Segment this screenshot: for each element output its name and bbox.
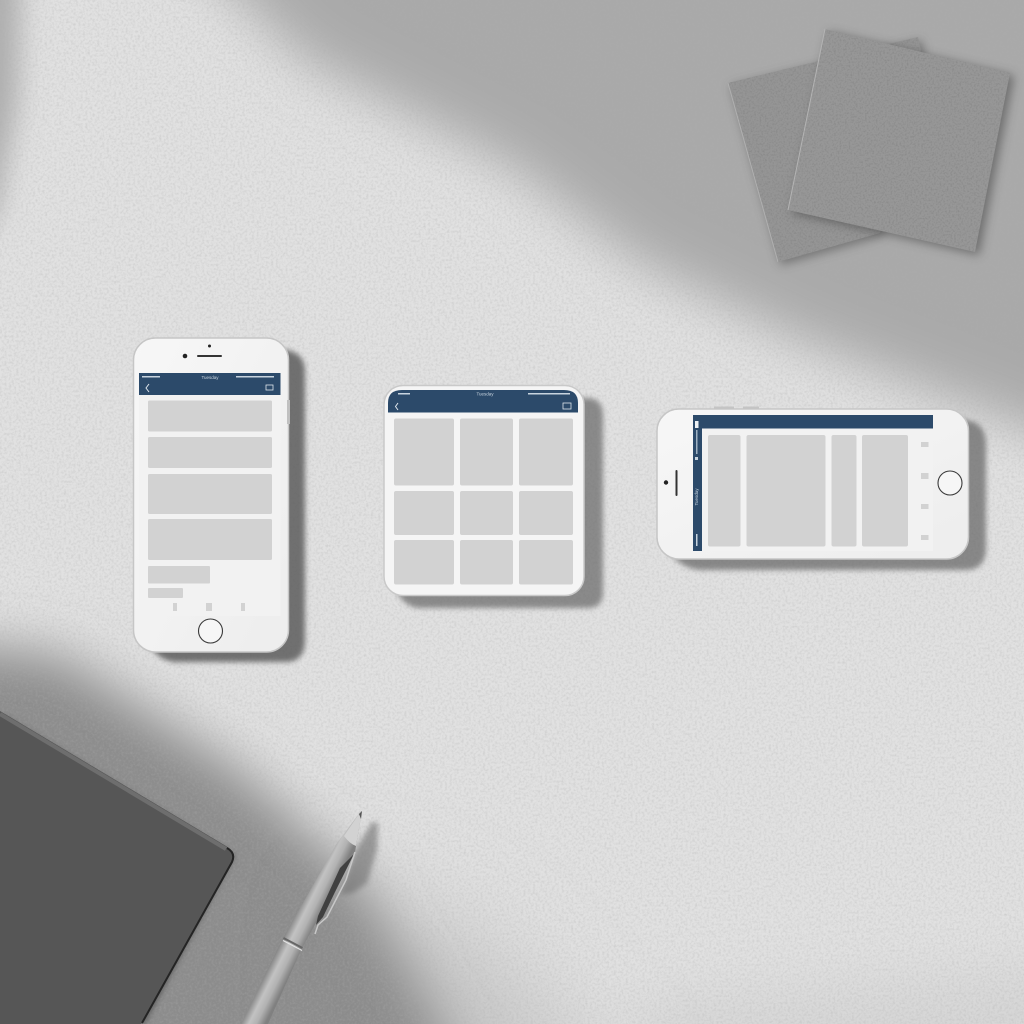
landscape screen	[693, 415, 933, 551]
landscape phone body	[657, 409, 968, 559]
phone: landscape	[657, 406, 986, 570]
portrait phone shadow	[148, 350, 305, 662]
square device body	[384, 386, 584, 596]
pen tip highlight	[344, 811, 362, 846]
front coaster	[788, 29, 1014, 255]
portrait earpiece and camera	[183, 344, 222, 358]
rear coaster	[728, 37, 924, 265]
pen	[241, 811, 378, 1024]
square content grid	[394, 418, 573, 584]
portrait nav bar: Tuesday	[201, 375, 219, 380]
portrait home button	[198, 619, 222, 643]
square nav bar: Tuesday	[476, 392, 494, 396]
device: square	[384, 386, 603, 608]
pen shadow	[340, 822, 378, 895]
square device shadow	[398, 398, 603, 608]
portrait content blocks	[148, 400, 272, 611]
landscape earpiece and camera	[664, 470, 678, 496]
portrait phone body	[134, 338, 288, 652]
landscape home button	[938, 471, 962, 495]
tablet corner: bottom left	[0, 711, 235, 1024]
landscape phone shadow	[670, 420, 986, 570]
landscape nav bars	[693, 415, 933, 551]
phone: portrait	[134, 338, 305, 662]
pen barrel	[241, 811, 362, 1024]
square nav bar	[388, 390, 578, 412]
coaster stack: top right	[728, 29, 1014, 265]
landscape nav bars: Tuesday	[694, 488, 699, 506]
pen ring	[284, 938, 302, 948]
pen clip	[316, 854, 354, 925]
portrait nav bar	[139, 373, 280, 395]
landscape content columns	[708, 435, 928, 546]
portrait screen	[139, 373, 280, 616]
